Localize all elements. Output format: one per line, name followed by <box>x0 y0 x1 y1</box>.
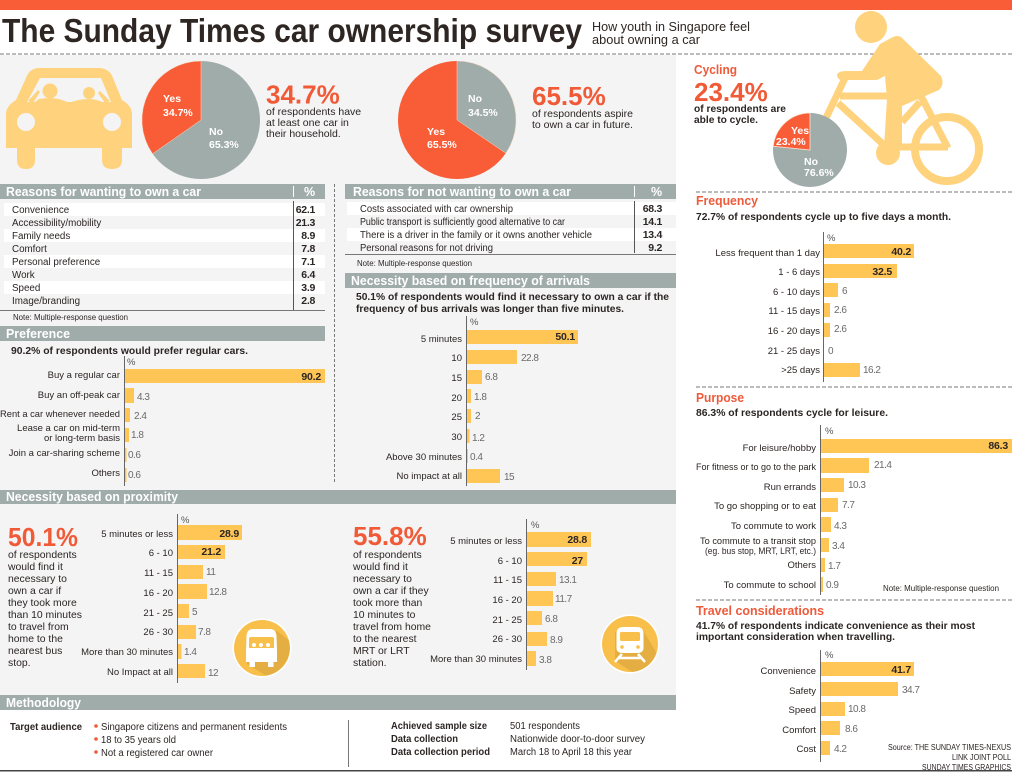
panel: preference <box>0 326 325 486</box>
bar: 10: 22.8 <box>521 353 539 364</box>
bar: 6-10: 27 <box>572 555 583 567</box>
bar: 20 <box>451 389 487 404</box>
pie: household car: 65.3% <box>209 139 239 151</box>
bar: 21-25: 21 - 25 <box>492 615 522 626</box>
panel: preference: 90.2% of respondents would prefer regular cars. <box>11 345 248 357</box>
bar: less frequent than 1 day <box>715 244 914 259</box>
panel: methodology: 501 respondents <box>510 721 580 732</box>
bar: 11-15 <box>493 572 577 586</box>
table: reasons for not wanting to own a car: 68.3 <box>643 203 662 215</box>
bar: comfort <box>782 721 858 736</box>
callout: 50.1% bus stop: stop. <box>8 658 31 669</box>
bar: errands: 10.3 <box>848 480 866 491</box>
bar: 26-30: 8.9 <box>550 635 563 646</box>
bar: convenience <box>761 662 914 677</box>
bar: 1-6 days: 1 - 6 days <box>778 267 820 278</box>
panel: frequency <box>696 194 951 382</box>
bar chart: bus stop proximity: % <box>181 515 190 526</box>
bar: 11-15: 11 - 15 <box>493 575 522 586</box>
callout: 65.5%: 65.5% <box>532 81 606 111</box>
bar: 26-30 <box>492 632 563 646</box>
bar: above 30 minutes: Above 30 minutes <box>386 452 462 463</box>
pie: able to cycle: 23.4% <box>776 136 806 148</box>
callout: 55.8% MRT: MRT or LRT <box>353 646 410 657</box>
bar: shopping: To go shopping or to eat <box>714 501 816 512</box>
panel: methodology <box>0 695 676 767</box>
panel: methodology: Nationwide door-to-door survey <box>510 734 645 745</box>
panel: necessity based on frequency of arrivals <box>345 273 676 486</box>
table: reasons for wanting to own a car: Comfort <box>12 244 47 255</box>
table: reasons for wanting to own a car: Image/branding <box>12 296 80 307</box>
callout: cycling: able to cycle. <box>694 114 758 126</box>
pie: household car: No <box>209 126 223 138</box>
panel: methodology: Methodology <box>6 696 81 710</box>
bar: 15: 6.8 <box>485 372 498 383</box>
table: reasons for not wanting to own a car: 9.2 <box>648 242 662 254</box>
bar: leisure <box>743 439 1012 454</box>
callout: 55.8% MRT: took more than <box>353 598 423 609</box>
bar chart: bus stop proximity <box>81 514 242 683</box>
table: reasons for wanting to own a car: 62.1 <box>296 204 315 216</box>
bar: 26-30: 26 - 30 <box>492 634 522 645</box>
bar: rent a car: Rent a car whenever needed <box>0 409 120 420</box>
callout: 50.1% bus stop: own a car if <box>8 586 61 597</box>
bar: 25: 25 <box>451 412 462 423</box>
bar: 16-20: 11.7 <box>555 594 573 605</box>
panel: preference: % <box>127 357 136 368</box>
bar: more than 30 minutes: More than 30 minutes <box>430 654 522 665</box>
bar: 15 <box>451 370 498 384</box>
icon: bus <box>232 618 292 678</box>
bar: no impact at all: No impact at all <box>397 471 462 482</box>
bar: 16-20: 16 - 20 <box>143 588 173 599</box>
callout: 34.7%: 34.7% <box>266 80 340 110</box>
bar: 26-30: 26 - 30 <box>143 627 173 638</box>
callout: 50.1% bus stop: of respondents <box>8 550 77 561</box>
bar: 11-15 days <box>768 303 847 317</box>
bar: buy a regular car: Buy a regular car <box>48 370 120 381</box>
bar: errands <box>764 478 866 493</box>
bar: 5 minutes or less: 5 minutes or less <box>101 529 173 540</box>
table: reasons for wanting to own a car: Family needs <box>12 231 70 242</box>
callout: cycling: Cycling <box>694 63 737 77</box>
bar: 21-25: 5 <box>192 607 198 618</box>
pie: aspire to own <box>398 61 516 179</box>
bar: 25 <box>451 409 481 423</box>
bar: 5 minutes: 5 minutes <box>421 334 462 345</box>
bar: transit stop: To commute to a transit stop <box>700 536 816 547</box>
panel: necessity based on frequency of arrivals: Necessity based on frequency of arrivals <box>351 274 590 288</box>
callout: 55.8% MRT: necessary to <box>353 574 412 585</box>
bar: 16-20 days: 2.6 <box>834 324 847 335</box>
panel: frequency: Frequency <box>696 194 758 208</box>
bar: 1-6 days <box>778 264 897 278</box>
bar: 6-10: 21.2 <box>201 546 221 558</box>
bar: no impact at all <box>107 664 219 679</box>
bar: 11-15: 11 - 15 <box>144 568 173 579</box>
bar: 11-15 days: 11 - 15 days <box>768 306 820 317</box>
callout: 55.8% MRT: 55.8% <box>353 521 427 551</box>
callout: 55.8% MRT: travel from home <box>353 622 431 633</box>
table: reasons for not wanting to own a car: 14.1 <box>643 216 662 228</box>
bar: 11-15 <box>144 565 216 579</box>
bar: 6-10 <box>498 552 587 567</box>
bar: transit stop <box>700 536 845 557</box>
bar: 6-10 days: 6 - 10 days <box>773 287 820 298</box>
bar: commute to work: To commute to work <box>731 521 816 532</box>
top banner <box>0 0 1012 10</box>
bar: 5 minutes <box>421 330 578 345</box>
table: reasons for wanting to own a car: Convenience <box>12 205 70 216</box>
bar: safety <box>789 682 920 697</box>
bar: lease a car <box>17 423 144 444</box>
bar: others: 0.6 <box>128 470 141 481</box>
bar: more than 30 minutes: 3.8 <box>539 655 552 666</box>
table: reasons for wanting to own a car: Speed <box>12 283 40 294</box>
bar: no impact at all: 15 <box>504 472 515 483</box>
table: reasons for not wanting to own a car: Personal reasons for not driving <box>360 243 493 254</box>
panel: necessity based on frequency of arrivals: frequency of bus arrivals was longer than five minutes. <box>356 303 624 315</box>
bar: more than 30 minutes: More than 30 minutes <box>81 647 173 658</box>
table: reasons for wanting to own a car: Personal preference <box>12 257 101 268</box>
panel: travel considerations: % <box>825 650 834 661</box>
table: reasons for wanting to own a car: 7.8 <box>301 243 315 255</box>
pie: household car <box>142 61 260 179</box>
bar: 6-10 days: 6 <box>842 286 848 297</box>
callout: 55.8% MRT <box>352 521 431 669</box>
bar: above 30 minutes: 0.4 <box>470 452 483 463</box>
callout: 50.1% bus stop: to travel from <box>8 622 69 633</box>
bar: 21-25: 21 - 25 <box>143 608 173 619</box>
panel: frequency: 72.7% of respondents cycle up to five days a month. <box>696 211 951 223</box>
panel: purpose: Purpose <box>696 391 744 405</box>
bar: fitness <box>696 458 892 473</box>
panel: purpose: 86.3% of respondents cycle for leisure. <box>696 407 888 419</box>
bar: speed <box>789 702 866 716</box>
icon: car <box>6 68 132 169</box>
bar: 5 minutes or less <box>450 532 591 547</box>
pie: aspire to own: 34.5% <box>468 107 498 119</box>
panel: methodology: Singapore citizens and permanent residents <box>101 722 287 733</box>
bar: more than 25 days <box>781 363 881 377</box>
panel: frequency: % <box>827 233 836 244</box>
bar chart: MRT proximity <box>430 519 591 670</box>
bar: 26-30: 7.8 <box>198 627 211 638</box>
bar: safety: Safety <box>789 686 816 697</box>
bar: 6-10 <box>149 545 225 559</box>
bar: transit stop: 3.4 <box>832 541 845 552</box>
bar: less frequent than 1 day: Less frequent than 1 day <box>715 248 820 259</box>
table: reasons for not wanting to own a car: Note: Multiple-response question <box>357 259 472 268</box>
bar: others: 1.7 <box>828 561 841 572</box>
bar: commute to school: To commute to school <box>724 580 816 591</box>
callout: 34.7%: of respondents have <box>266 106 361 118</box>
callout: 50.1% bus stop: nearest bus <box>8 646 62 657</box>
bar: 10: 10 <box>451 353 462 364</box>
bar: more than 25 days: 16.2 <box>863 365 881 376</box>
bar: 21-25 <box>492 611 558 626</box>
pie: aspire to own: Yes <box>427 126 445 138</box>
bar: 6-10 days <box>773 283 848 298</box>
bar: comfort: Comfort <box>782 725 816 736</box>
bar: 30: 1.2 <box>472 433 485 444</box>
bar: safety: 34.7 <box>902 685 920 696</box>
panel: preference: Preference <box>6 327 70 341</box>
bar: convenience: Convenience <box>761 666 816 677</box>
panel: methodology: Not a registered car owner <box>101 748 214 759</box>
table: reasons for wanting to own a car: Accessibility/mobility <box>12 218 101 229</box>
panel: methodology: 18 to 35 years old <box>101 735 176 746</box>
bar: 30 <box>451 429 485 444</box>
panel: travel considerations <box>696 604 975 762</box>
callout: 55.8% MRT: own a car if they <box>353 586 429 597</box>
callout: 50.1% bus stop: would find it <box>7 562 63 573</box>
bar: 6-10: 6 - 10 <box>149 548 173 559</box>
callout: cycling: of respondents are <box>694 103 786 115</box>
callout: 50.1% bus stop: necessary to <box>8 574 67 585</box>
table: reasons for not wanting to own a car: % <box>651 185 662 199</box>
bar: 1-6 days: 32.5 <box>872 266 892 278</box>
panel: methodology: Target audience <box>10 722 83 733</box>
bar: lease a car: 1.8 <box>131 430 144 441</box>
panel: travel considerations: Travel considerations <box>696 604 824 618</box>
bar: buy a regular car <box>48 369 325 383</box>
bar: commute to school <box>724 577 839 592</box>
bar: cost: Cost <box>796 744 816 755</box>
bar: lease a car: Lease a car on mid-term <box>17 423 120 434</box>
bar: 5 minutes or less: 28.9 <box>219 528 239 540</box>
panel: methodology: Data collection period <box>391 747 490 758</box>
bar: 21-25 days: 21 - 25 days <box>768 346 820 357</box>
bar: no impact at all: No Impact at all <box>107 667 173 678</box>
bar: buy a regular car: 90.2 <box>301 371 321 383</box>
bar: buy an off-peak car: Buy an off-peak car <box>38 390 120 401</box>
bar: others <box>787 558 841 572</box>
table: reasons for not wanting to own a car: Reasons for not wanting to own a car <box>353 185 571 199</box>
bar: 16-20: 12.8 <box>209 587 227 598</box>
callout: cycling <box>694 63 786 126</box>
table: reasons for wanting to own a car: Work <box>12 270 35 281</box>
bar: rent a car: 2.4 <box>134 411 147 422</box>
pie: aspire to own: 65.5% <box>427 139 457 151</box>
bar: 21-25 <box>143 604 198 619</box>
bar: 5 minutes or less <box>101 525 242 540</box>
table: reasons for wanting to own a car: 2.8 <box>301 295 315 307</box>
table: reasons for not wanting to own a car: Public transport is sufficiently good alternative to car <box>360 217 566 228</box>
bar: 16-20 <box>143 584 227 599</box>
callout: 55.8% MRT: to the nearest <box>353 634 417 645</box>
callout: 55.8% MRT: station. <box>353 658 387 669</box>
bar: 30: 30 <box>451 432 462 443</box>
pie: aspire to own: No <box>468 93 482 105</box>
header: necessity based on proximity: Necessity based on proximity <box>6 490 178 504</box>
bar: commute to school: 0.9 <box>826 580 839 591</box>
title: The Sunday Times car ownership survey <box>2 12 583 49</box>
bar: car-sharing: Join a car-sharing scheme <box>9 448 120 459</box>
pie: able to cycle: No <box>804 156 818 168</box>
bar: others: Others <box>787 560 816 571</box>
callout: 65.5% <box>532 81 633 131</box>
bar: less frequent than 1 day: 40.2 <box>891 246 911 258</box>
pie: household car: 34.7% <box>163 107 193 119</box>
bar: speed: 10.8 <box>848 704 866 715</box>
icon: cyclist <box>826 11 979 181</box>
panel: necessity based on frequency of arrivals: 50.1% of respondents would find it necessary to own a car if the <box>356 291 669 303</box>
pie: household car: Yes <box>163 93 181 105</box>
bar: 21-25 days: 0 <box>828 346 834 357</box>
bar: 26-30 <box>143 625 211 639</box>
bar: more than 30 minutes: 1.4 <box>184 647 197 658</box>
callout: 65.5%: of respondents aspire <box>532 108 633 120</box>
panel: necessity based on frequency of arrivals: % <box>470 317 479 328</box>
panel: purpose <box>696 391 1012 595</box>
callout: 55.8% MRT: would find it <box>352 562 408 573</box>
bar: others: Others <box>91 468 120 479</box>
bar chart: MRT proximity: % <box>531 520 540 531</box>
bar: transit stop: (eg. bus stop, MRT, LRT, etc.) <box>705 546 816 557</box>
table: reasons for wanting to own a car <box>0 184 325 322</box>
note: Note: Multiple-response question <box>883 584 999 593</box>
table: reasons for wanting to own a car: 21.3 <box>296 217 315 229</box>
bar: car-sharing <box>9 448 141 462</box>
table: reasons for not wanting to own a car: Costs associated with car ownership <box>360 204 514 215</box>
bar: buy an off-peak car <box>38 388 150 403</box>
callout: cycling: 23.4% <box>694 77 768 107</box>
bar: no impact at all: 12 <box>208 668 219 679</box>
bar: speed: Speed <box>789 705 816 716</box>
panel: travel considerations: important consideration when travelling. <box>696 631 895 643</box>
bar: 16-20 days <box>768 323 847 337</box>
table: reasons for wanting to own a car: 6.4 <box>301 269 315 281</box>
bar: no impact at all <box>397 469 515 483</box>
table: reasons for wanting to own a car: 7.1 <box>301 256 315 268</box>
bar: others <box>91 468 141 482</box>
bar: 21-25: 6.8 <box>545 614 558 625</box>
pie: able to cycle: Yes <box>791 125 809 137</box>
table: reasons for not wanting to own a car: 13.4 <box>643 229 662 241</box>
table: reasons for wanting to own a car: 3.9 <box>301 282 315 294</box>
panel: methodology: March 18 to April 18 this year <box>510 747 633 758</box>
bar: fitness: For fitness or to go to the park <box>696 462 816 473</box>
panel: methodology: Data collection <box>391 734 458 745</box>
bar: leisure: For leisure/hobby <box>743 443 816 454</box>
callout: 50.1% bus stop: home to the <box>8 634 63 645</box>
bar: 20: 20 <box>451 393 462 404</box>
pie: able to cycle <box>773 113 847 187</box>
callout: 65.5%: to own a car in future. <box>532 119 633 131</box>
table: reasons for wanting to own a car: Reasons for wanting to own a car <box>6 185 201 199</box>
bar: more than 30 minutes <box>430 651 552 666</box>
panel: purpose: % <box>825 426 834 437</box>
icon: train <box>600 614 660 674</box>
bar: cost <box>796 741 847 755</box>
callout: 50.1% bus stop: they took more <box>8 598 77 609</box>
subtitle: about owning a car <box>592 32 701 47</box>
bar: 20: 1.8 <box>474 392 487 403</box>
callout: 34.7% <box>266 80 361 140</box>
bar: rent a car <box>0 408 147 422</box>
bar: 16-20 <box>492 591 573 606</box>
callout: 50.1% bus stop: 50.1% <box>8 522 78 552</box>
bar: errands: Run errands <box>764 482 816 493</box>
bar: shopping: 7.7 <box>842 500 855 511</box>
callout: 55.8% MRT: 10 minutes to <box>353 610 416 621</box>
bar: more than 25 days: >25 days <box>781 365 820 376</box>
callout: 55.8% MRT: of respondents <box>353 550 422 561</box>
bar: 16-20: 16 - 20 <box>492 595 522 606</box>
bar: lease a car: or long-term basis <box>44 433 120 444</box>
bar: more than 30 minutes <box>81 644 197 659</box>
panel: methodology: Achieved sample size <box>391 721 488 732</box>
subtitle: How youth in Singapore feel <box>592 19 750 34</box>
bar: 15: 15 <box>451 373 462 384</box>
bar: 11-15: 11 <box>206 567 216 578</box>
bar: 5 minutes or less: 5 minutes or less <box>450 536 522 547</box>
bar: convenience: 41.7 <box>891 664 911 676</box>
table: reasons for not wanting to own a car: There is a driver in the family or it owns another vehicle <box>360 230 593 241</box>
callout: 50.1% bus stop <box>7 522 82 669</box>
table: reasons for wanting to own a car: 8.9 <box>301 230 315 242</box>
table: reasons for wanting to own a car: Note: Multiple-response question <box>13 313 128 322</box>
bar: 16-20 days: 16 - 20 days <box>768 326 820 337</box>
bar: fitness: 21.4 <box>874 460 892 471</box>
bar: commute to work <box>731 517 847 532</box>
table: reasons for wanting to own a car: % <box>304 185 315 199</box>
subtitle <box>592 19 750 47</box>
bar: 10 <box>451 350 539 364</box>
bar: cost: 4.2 <box>834 744 847 755</box>
callout: 50.1% bus stop: than 10 minutes <box>8 610 82 621</box>
callout: 34.7%: their household. <box>266 128 341 140</box>
bar: buy an off-peak car: 4.3 <box>137 392 150 403</box>
bar: car-sharing: 0.6 <box>128 450 141 461</box>
bar: 25: 2 <box>475 411 481 422</box>
panel: travel considerations: 41.7% of respondents indicate convenience as their most <box>696 620 975 632</box>
bar: leisure: 86.3 <box>988 440 1008 452</box>
bar: shopping <box>714 498 855 512</box>
source credit <box>888 743 1011 772</box>
callout: 34.7%: at least one car in <box>266 117 349 129</box>
bar: 11-15 days: 2.6 <box>834 305 847 316</box>
bar: above 30 minutes <box>386 449 483 463</box>
pie: able to cycle: 76.6% <box>804 167 834 179</box>
bar: comfort: 8.6 <box>845 724 858 735</box>
header: necessity based on proximity <box>0 490 676 504</box>
bar: 5 minutes or less: 28.8 <box>567 534 587 546</box>
bar: 6-10: 6 - 10 <box>498 556 522 567</box>
bar: 5 minutes: 50.1 <box>555 331 575 343</box>
bar: commute to work: 4.3 <box>834 521 847 532</box>
table: reasons for not wanting to own a car <box>345 184 676 268</box>
bar: 11-15: 13.1 <box>559 575 577 586</box>
